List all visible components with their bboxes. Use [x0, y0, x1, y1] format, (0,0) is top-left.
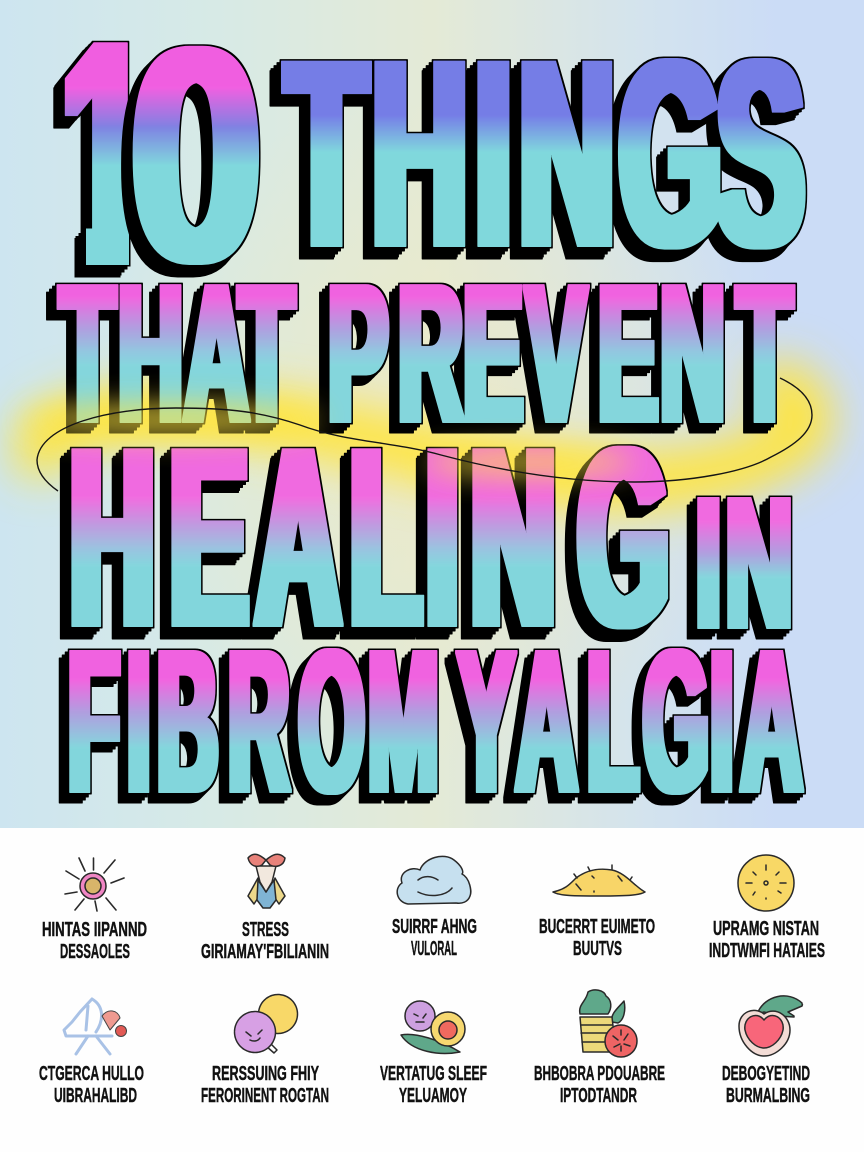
caption 2: GIRIAMAY'FBILIANIN [201, 941, 329, 963]
caption 1: DESSAOLES [60, 941, 130, 963]
caption 7: FERORINENT ROGTAN [201, 1085, 329, 1107]
caption 2: STRESS [242, 919, 289, 941]
caption 2 [201, 919, 329, 963]
background panel [0, 0, 864, 828]
caption 6: CTGERCA HULLO [39, 1063, 144, 1085]
title line: IN: IN [696, 460, 793, 667]
curved line [37, 378, 812, 491]
title line: THAT: THAT [60, 245, 294, 463]
caption 1: HINTAS IIPANND [42, 919, 147, 941]
caption 8 [380, 1063, 487, 1107]
yellow glow over lettering [20, 405, 635, 474]
icon: figure [248, 854, 285, 908]
caption 7 [201, 1063, 329, 1107]
title [60, 0, 804, 834]
title line: HEALING: HEALING [70, 395, 669, 679]
caption 10: BURMALBING [726, 1085, 810, 1107]
title line: THINGS: THINGS [286, 6, 804, 302]
caption 10 [722, 1063, 810, 1107]
icon: jar and tomato [580, 990, 637, 1057]
icon: sun [65, 858, 124, 911]
caption 1 [42, 919, 147, 963]
caption 8: YELUAMOY [399, 1085, 467, 1107]
caption 3: SUIRRF AHNG [392, 916, 477, 938]
yellow glow behind title [40, 388, 805, 482]
icon: heart with leaf [739, 996, 802, 1056]
caption 6 [39, 1063, 144, 1107]
caption 9: IPTODTANDR [560, 1085, 637, 1107]
icon: cloud [397, 856, 471, 904]
caption 6: UIBRAHALIBD [54, 1085, 137, 1107]
icon: purple and yellow puffs [234, 994, 298, 1053]
caption 3 [392, 916, 477, 960]
title line: FIBROMYALGIA: FIBROMYALGIA [68, 608, 802, 834]
caption 7: RERSSUING FHIY [212, 1063, 319, 1085]
caption 3: VULORAL [411, 938, 457, 960]
caption 9: BHBOBRA PDOUABRE [534, 1063, 665, 1085]
caption 4: BUCERRT EUIMETO [539, 916, 655, 938]
caption 9 [534, 1063, 665, 1107]
results panel [0, 828, 864, 1152]
caption 8: VERTATUG SLEEF [380, 1063, 487, 1085]
caption 4 [539, 916, 655, 960]
icon: fruit and leaf [401, 1001, 465, 1053]
caption 5 [709, 918, 825, 962]
icon: yellow disc [738, 855, 794, 911]
icon: mound [553, 865, 645, 896]
title line: PREVENT: PREVENT [328, 245, 792, 463]
caption 4: BUUTVS [573, 938, 622, 960]
icon: blue chair figure [64, 999, 126, 1054]
